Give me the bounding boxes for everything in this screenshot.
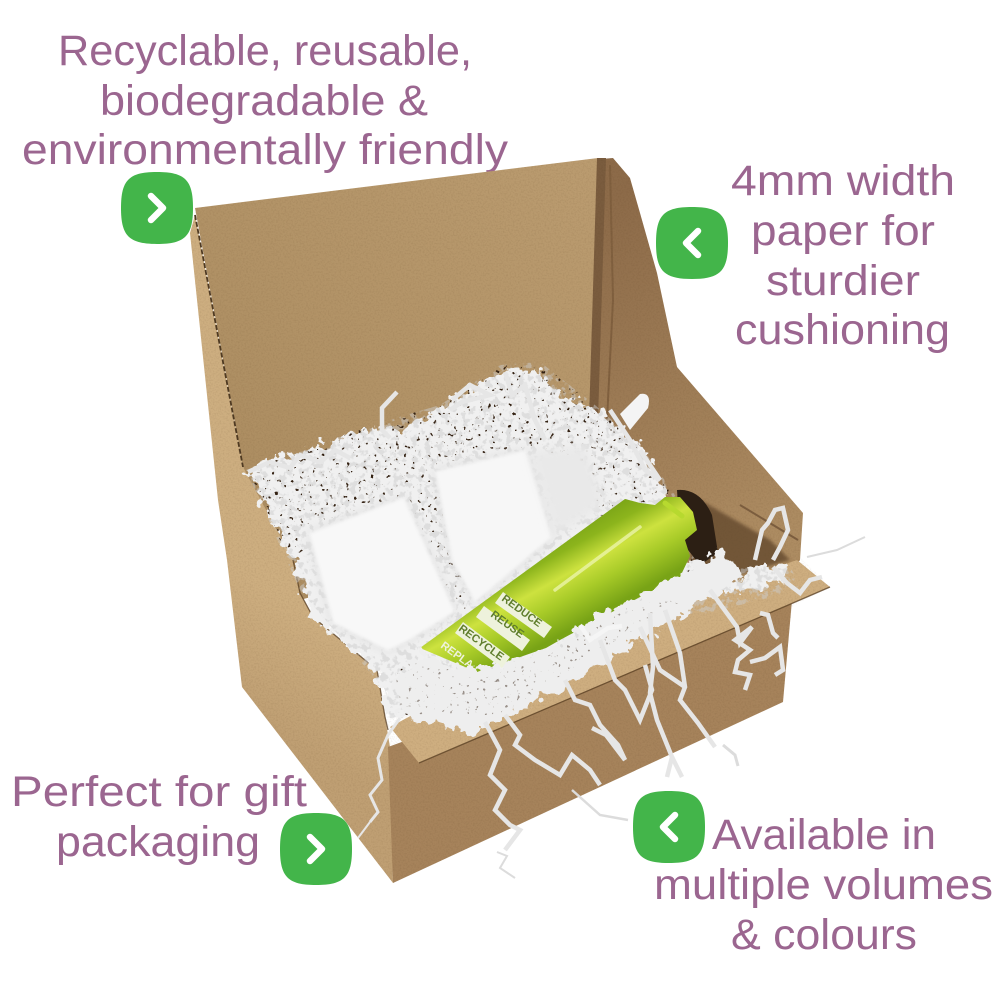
fold lines	[195, 215, 243, 467]
heading: paper width: 4mm width	[731, 157, 955, 205]
foreground shredded paper	[395, 548, 745, 735]
box right inner panel	[590, 158, 803, 620]
green bottle	[420, 497, 697, 672]
dark fold strip	[589, 158, 606, 420]
heading: volumes and colours: Available in	[712, 811, 936, 859]
label: replace: REPLA	[438, 640, 475, 671]
heading: gift packaging: Perfect for gift	[11, 768, 307, 816]
heading: volumes and colours: multiple volumes	[654, 861, 993, 909]
shredded paper texture	[245, 360, 805, 740]
heading: volumes and colours: & colours	[731, 911, 917, 959]
heading: paper width	[731, 157, 955, 354]
white cap	[620, 394, 649, 430]
shredded paper speckles	[254, 365, 710, 715]
front mug	[309, 497, 455, 651]
back mug	[435, 445, 605, 603]
box left side panel	[190, 215, 393, 883]
heading: volumes and colours	[654, 811, 993, 959]
cardboard grain	[185, 150, 840, 890]
label: reduce: REDUCE	[499, 593, 544, 630]
heading: recyclable	[22, 27, 509, 174]
heading: paper width: sturdier	[766, 257, 920, 305]
heading: paper width: paper for	[751, 207, 935, 255]
back mug right shade	[530, 445, 605, 535]
shadow behind bottle	[690, 500, 790, 580]
box front flap	[390, 560, 830, 763]
heading: recyclable: environmentally friendly	[22, 126, 509, 174]
button: bottom right arrow	[633, 791, 705, 863]
label: reduce	[495, 592, 552, 638]
heading: recyclable: biodegradable &	[100, 77, 428, 125]
box front panel	[388, 600, 792, 883]
button: bottom left arrow	[280, 813, 352, 885]
foreground speckles	[396, 600, 678, 715]
loose paper shreds	[248, 372, 822, 850]
label: recycle: RECYCLE	[456, 623, 506, 663]
heading: recyclable: Recyclable, reusable,	[58, 27, 472, 75]
heading: paper width: cushioning	[735, 306, 950, 354]
shredded paper mass	[247, 368, 787, 735]
button: top left arrow	[121, 172, 193, 244]
box back panel	[195, 158, 598, 600]
cardboard box with contents	[185, 150, 865, 890]
dark bottle handle	[677, 490, 718, 565]
button: top right arrow	[656, 207, 728, 279]
heading: gift packaging: packaging	[56, 818, 260, 866]
label: reuse: REUSE	[488, 609, 526, 641]
bottle highlight	[555, 527, 640, 590]
heading: gift packaging	[11, 768, 307, 866]
bottle neck shine	[665, 503, 682, 516]
faint paper shreds	[497, 537, 865, 878]
label: reuse	[476, 606, 530, 651]
